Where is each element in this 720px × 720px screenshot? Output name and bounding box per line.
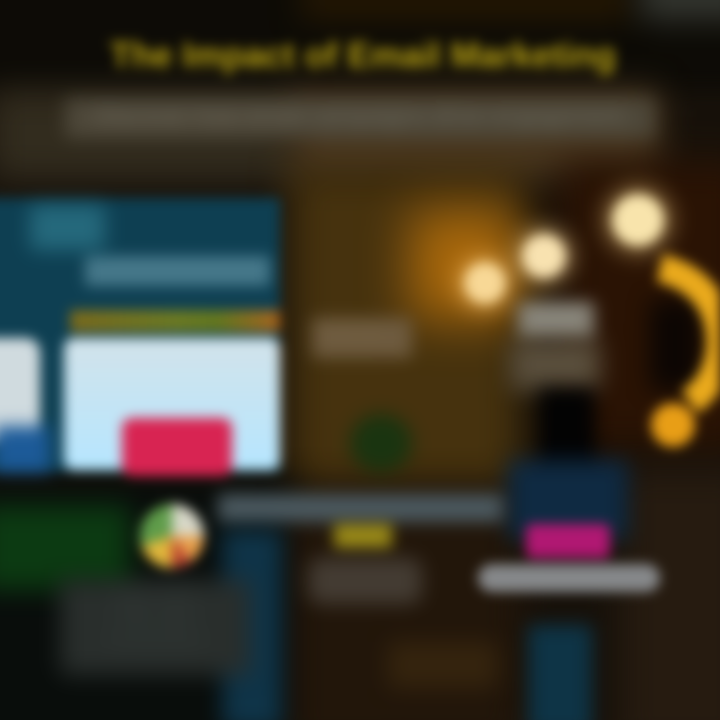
head grey patch [518, 302, 594, 338]
panel: email screen [0, 190, 290, 486]
light 2 [522, 234, 566, 278]
grey table [308, 558, 422, 604]
email card [64, 338, 280, 470]
blue legs [528, 625, 592, 720]
red button [122, 418, 232, 476]
person silhouette [470, 290, 668, 601]
table top [478, 564, 660, 592]
light 1 [464, 262, 506, 304]
text under logo: Click rates [115, 606, 195, 625]
green panel [0, 505, 130, 590]
wall label [312, 318, 412, 358]
subtitle text [65, 98, 655, 138]
screen heading [85, 256, 270, 286]
blue column [222, 530, 282, 720]
icon: yellow question mark [642, 246, 720, 456]
blue shadow [0, 426, 50, 472]
body dark [540, 388, 595, 498]
torso grey patch [510, 340, 600, 390]
glowing lights [448, 172, 686, 322]
screen background [0, 198, 280, 472]
lower brown block [388, 642, 498, 688]
coloured label strip [70, 310, 280, 332]
icon: colourful email logo [140, 504, 204, 568]
text under logo: Open rates [113, 582, 197, 601]
text under logo: Conversions [108, 630, 202, 649]
yellow item on table [334, 524, 392, 548]
blue jacket [508, 460, 628, 540]
text under logo [60, 580, 250, 675]
plant [350, 414, 412, 472]
side card [0, 338, 40, 442]
title: The Impact of Email Marketing [110, 36, 616, 75]
light 3 [612, 194, 664, 246]
subtitle text: Discover how email campaigns drive engagement [95, 102, 625, 129]
screen top text [30, 205, 105, 250]
desk strip [218, 494, 503, 522]
magenta item [526, 524, 610, 558]
wall label: Email list [312, 318, 380, 337]
